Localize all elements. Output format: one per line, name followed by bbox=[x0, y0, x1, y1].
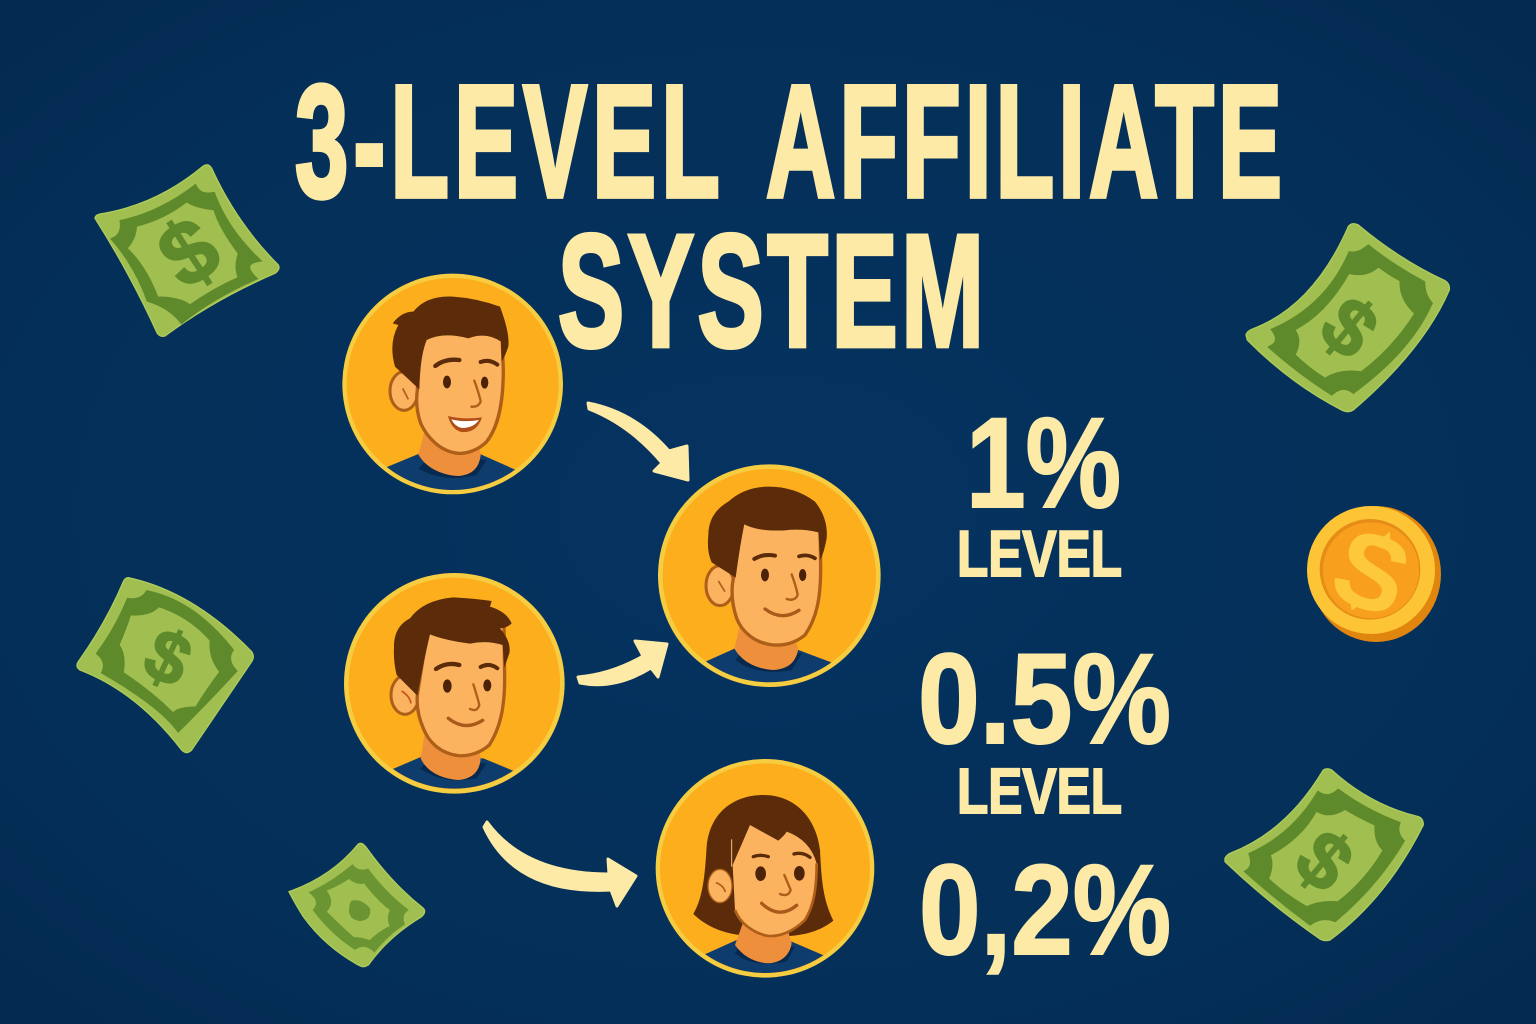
icon: dollar bill top right bbox=[1246, 224, 1449, 412]
stat: 1% level: LEVEL bbox=[957, 517, 1122, 590]
arrow: lower man to woman bbox=[484, 822, 636, 906]
stat: 0.5% level: LEVEL bbox=[957, 755, 1122, 827]
arrow: top man to centre man bbox=[588, 403, 688, 480]
stat: 0.5% level: 0.5% bbox=[918, 628, 1171, 771]
icon: dollar bill top left: $ bbox=[141, 197, 237, 309]
icon: dollar bill middle left: $ bbox=[132, 612, 204, 703]
icon: dollar bill bottom right bbox=[1225, 769, 1423, 941]
avatar: bottom woman, level three bbox=[656, 759, 874, 997]
stat: 0.5% level bbox=[918, 628, 1171, 827]
stat: 0,2%: 0,2% bbox=[919, 839, 1171, 982]
stat: 1% level bbox=[957, 392, 1122, 590]
avatar: lower man, recruit bbox=[344, 573, 565, 818]
avatar: centre man, recruit bbox=[658, 464, 881, 708]
icon: gold coin: S bbox=[1318, 503, 1425, 641]
stat: 1% level: 1% bbox=[966, 392, 1121, 535]
title: AFFILIATE bbox=[766, 52, 1282, 230]
title: SYSTEM bbox=[558, 202, 984, 381]
title bbox=[295, 52, 1282, 381]
icon: dollar bill bottom right: $ bbox=[1279, 812, 1370, 909]
icon: dollar bill middle left bbox=[77, 578, 253, 752]
icon: small dollar bill bottom bbox=[289, 843, 425, 967]
icon: dollar bill top left bbox=[95, 165, 279, 336]
icon: dollar bill top right: $ bbox=[1304, 279, 1395, 376]
arrow: lower man to centre man bbox=[578, 641, 667, 685]
avatar: top man, level one referrer bbox=[342, 274, 563, 513]
title: 3-LEVEL bbox=[295, 52, 720, 230]
